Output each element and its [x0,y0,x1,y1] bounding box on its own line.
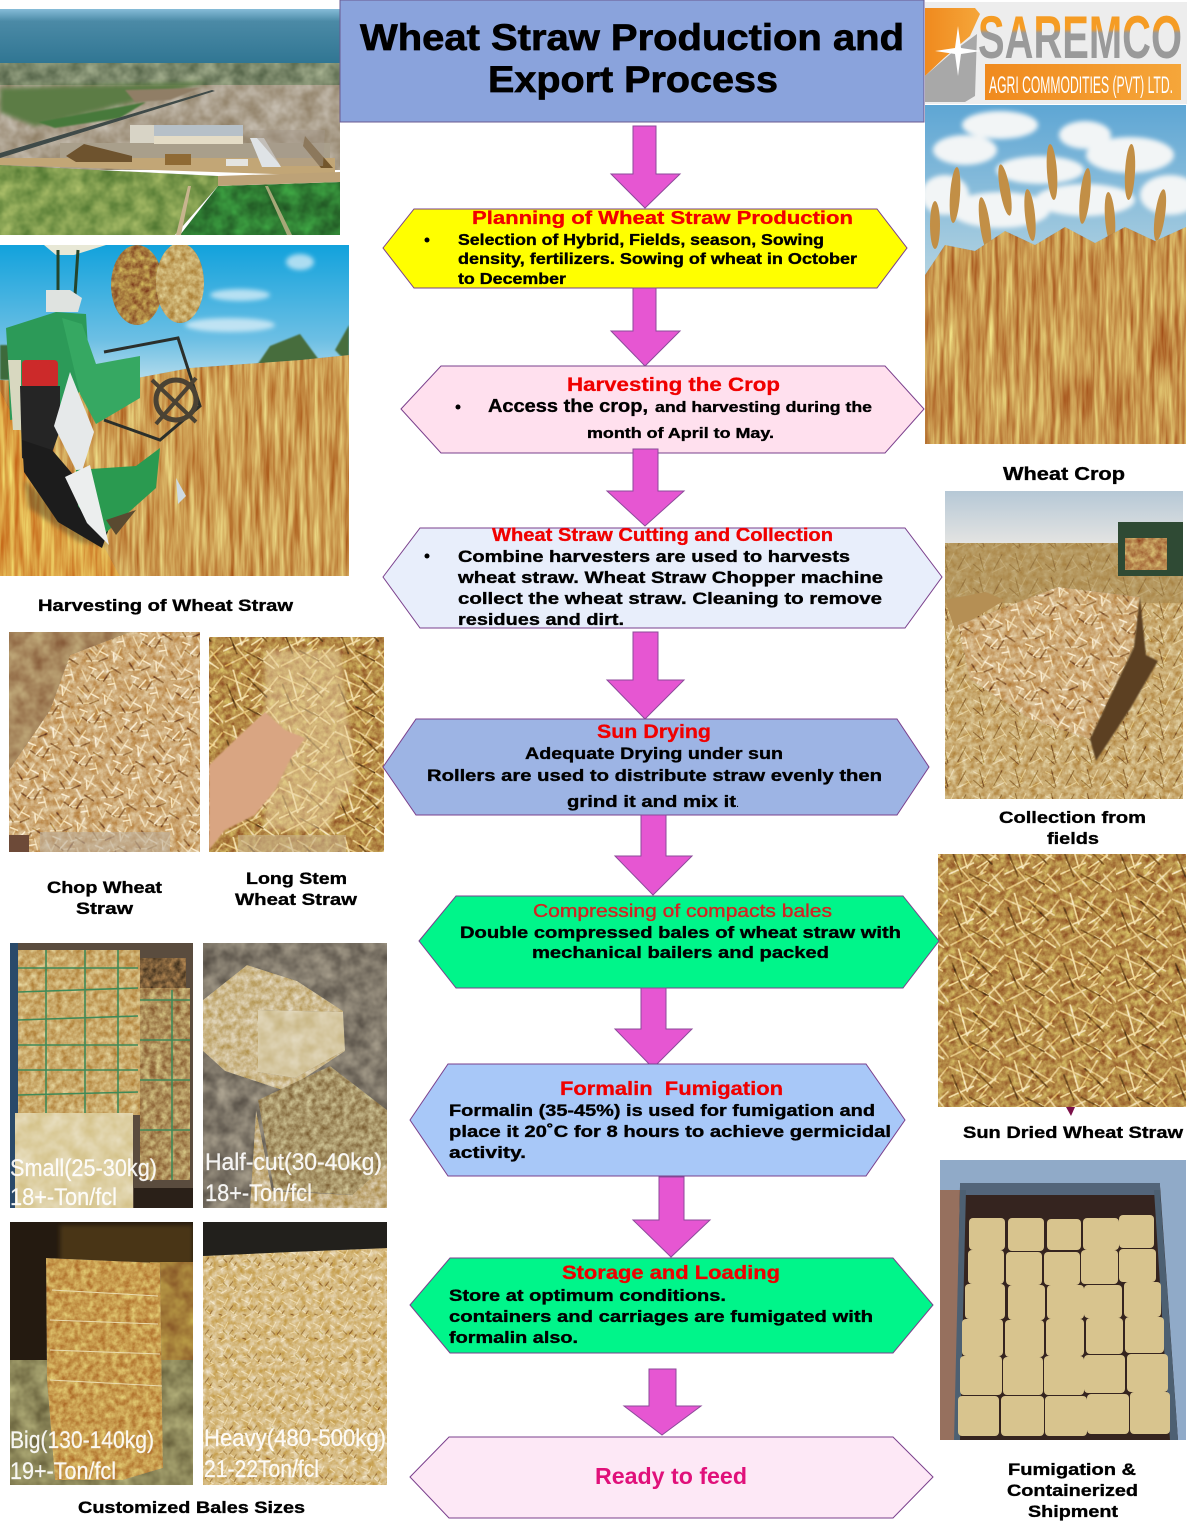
wheat ears [930,144,1169,253]
step 8: ready to feed [410,1437,933,1518]
photo: heavy bale [203,1222,387,1485]
grain discs [111,243,204,325]
photo: heavy bale: 21-22Ton/fcl [204,1456,319,1483]
step 7: storage and loading [410,1258,933,1353]
photo: small bales: 18+-Ton/fcl [10,1184,117,1211]
step 1: planning of wheat straw production [383,208,907,288]
harvester machine [6,245,200,548]
caption: fumigation and containerized shipment: Shipment [1028,1502,1118,1521]
caption: fumigation and containerized shipment: Containerized [1007,1481,1138,1500]
caption: harvesting of wheat straw: Harvesting of Wheat Straw [38,596,294,615]
caption: fumigation and containerized shipment: Fumigation & [1008,1460,1136,1479]
photo: heavy bale: Heavy(480-500kg) [204,1425,386,1452]
photo: long stem wheat straw [209,637,384,852]
photo: big bale: 19+-Ton/fcl [10,1458,116,1485]
step 2: harvesting the crop: month of April to May. [587,426,774,442]
photo: half-cut bales: Half-cut(30-40kg) [205,1149,382,1176]
step 6: formalin fumigation [410,1064,905,1176]
step 4: sun drying: Sun Drying [597,721,711,743]
step 2: harvesting the crop [401,366,924,453]
step 4: sun drying [383,719,929,815]
arrow: sun drying to compressing [615,815,692,895]
photo: collection from fields [945,491,1183,799]
title banner [340,0,924,122]
step 4: sun drying: Rollers are used to distribute straw evenly then [427,767,882,785]
step 7: storage and loading: containers and carriages are fumigated with [449,1308,873,1326]
caption: long stem wheat straw: Long Stem [246,869,347,888]
step 3: wheat straw cutting and collection: Combine harvesters are used to harvests [458,548,850,566]
step 3: wheat straw cutting and collection: residues and dirt. [458,611,624,629]
caption: sun dried wheat straw: Sun Dried Wheat Straw [963,1123,1184,1142]
step 6: formalin fumigation: place it 20˚C for 8 hours to achieve germicidal [449,1123,891,1141]
step 3: wheat straw cutting and collection: collect the wheat straw. Cleaning to remove [458,590,882,608]
step 7: storage and loading: formalin also. [449,1329,578,1347]
photo: chop wheat straw [9,632,200,852]
step 2: harvesting the crop: Harvesting the Crop [567,374,780,396]
step 2: harvesting the crop: and harvesting during the [655,400,872,416]
photo: big bale [10,1222,193,1485]
step 4: sun drying: grind it and mix it [567,793,737,811]
photo: small bales: Small(25-30kg) [10,1155,157,1182]
arrow: compressing to fumigation [615,988,692,1068]
caption: long stem wheat straw: Wheat Straw [235,890,358,909]
facility buildings [66,125,333,168]
step 3: wheat straw cutting and collection: wheat straw. Wheat Straw Chopper machine [457,569,883,587]
photo: aerial view of production facility [0,9,340,235]
step 7: storage and loading: Store at optimum conditions. [449,1287,726,1305]
photo: containerized bales [940,1160,1186,1440]
arrow: harvesting to cutting [607,449,684,526]
step 5: compressing of compacts bales: Compressing of compacts bales [533,901,832,921]
step 6: formalin fumigation: Formalin Fumigation [560,1078,783,1100]
caption: customized bales sizes: Customized Bales Sizes [78,1498,305,1517]
arrow: cutting to sun drying [607,632,684,719]
title banner: Wheat Straw Production and [360,17,904,58]
caption: chop wheat straw: Chop Wheat [47,878,162,897]
step 7: storage and loading: Storage and Loading [562,1262,780,1284]
photo: sun dried wheat straw [938,854,1186,1107]
arrow: storage to ready to feed [624,1369,701,1435]
step 4: sun drying: Adequate Drying under sun [525,745,783,763]
arrow: title to planning [611,126,680,208]
step 3: wheat straw cutting and collection [383,525,942,629]
caption: collection from fields: fields [1047,829,1099,848]
step 8: ready to feed: Ready to feed [595,1463,747,1489]
step 5: compressing of compacts bales: mechanical bailers and packed [532,944,829,962]
step 5: compressing of compacts bales: Double compressed bales of wheat straw with [460,924,901,942]
caption: wheat crop: Wheat Crop [1003,464,1125,484]
small marker below straw photo [1066,1107,1075,1116]
step 1: planning of wheat straw production: Selection of Hybrid, Fields, season, Sowing [458,232,824,249]
arrow: planning to harvesting [611,288,680,366]
photo: big bale: Big(130-140kg) [10,1427,154,1454]
hand [209,712,305,850]
caption: chop wheat straw: Straw [76,899,134,918]
step 3: wheat straw cutting and collection: Wheat Straw Cutting and Collection [492,525,833,545]
step 1: planning of wheat straw production: density, fertilizers. Sowing of wheat in October [458,251,857,268]
photo: half-cut bales: 18+-Ton/fcl [205,1180,312,1207]
photo: small bales [10,943,194,1211]
logo: Saremco Agri Commodities [925,2,1187,104]
step 4: sun drying: . [736,798,739,810]
photo: wheat crop [921,105,1187,444]
step 1: planning of wheat straw production: to December [458,271,566,288]
step 2: harvesting the crop: Access the crop, [488,396,648,416]
step 5: compressing of compacts bales [419,896,939,988]
arrow: fumigation to storage [633,1177,710,1257]
step 6: formalin fumigation: Formalin (35-45%) is used for fumigation and [449,1102,875,1120]
step 1: planning of wheat straw production: Planning of Wheat Straw Production [472,208,853,228]
photo: half-cut bales [203,943,387,1208]
photo: wheat harvester in field [0,243,349,576]
title banner: Export Process [488,59,778,100]
caption: collection from fields: Collection from [999,808,1146,827]
bale grid [958,1215,1170,1436]
step 6: formalin fumigation: activity. [449,1144,526,1162]
